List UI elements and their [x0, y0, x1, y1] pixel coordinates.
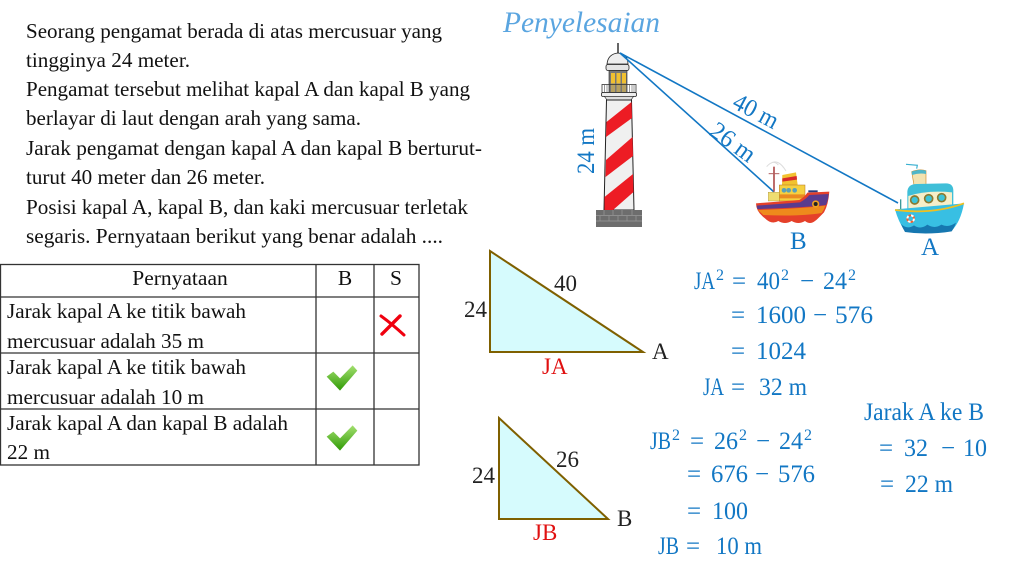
calculation: JB: 576	[778, 461, 815, 488]
calculation: JA: 1600	[756, 302, 806, 329]
text block: problem statement	[26, 19, 482, 248]
side label 40: 40	[554, 271, 577, 296]
icon: ship A	[895, 164, 964, 234]
calculation: JB	[650, 427, 815, 560]
calculation: JA: −	[813, 302, 827, 329]
row 1 text: mercusuar adalah 35 m	[7, 329, 204, 353]
table header: S	[390, 266, 402, 290]
sight line to ship B	[620, 53, 774, 192]
calculation: distance A to B: −	[941, 435, 955, 462]
row 3 text	[7, 411, 288, 464]
calculation: JB: JB	[658, 533, 679, 560]
sight line to ship A	[620, 53, 898, 203]
calculation: JA: 32 m	[759, 374, 808, 401]
calculation: JB: 676	[711, 461, 748, 488]
calculation: JA: 2	[781, 267, 789, 284]
calculation: distance A to B: =	[880, 471, 894, 498]
calculation: JB: =	[690, 428, 704, 455]
text block: problem statement: tingginya 24 meter.	[26, 48, 190, 72]
calculation: distance A to B: 32	[904, 435, 928, 462]
icon: ship B	[756, 162, 829, 223]
calculation: JB: −	[756, 428, 770, 455]
side label 24: 24	[472, 463, 496, 488]
table header: B	[338, 266, 352, 290]
text block: problem statement: Jarak pengamat dengan kapal A dan kapal B berturut-	[26, 136, 482, 160]
calculation: JB: =	[686, 533, 700, 560]
calculation: distance A to B: 22 m	[905, 471, 954, 498]
calculation: distance A to B	[864, 399, 987, 498]
calculation: JA: 2	[716, 267, 724, 284]
side label JB: JB	[533, 520, 557, 545]
row 1 text: Jarak kapal A ke titik bawah	[7, 299, 246, 323]
icon: lighthouse	[596, 43, 642, 227]
calculation: JA: 40	[757, 268, 780, 295]
row 2 text	[7, 355, 246, 409]
calculation: JB: =	[687, 461, 701, 488]
row 3 text: 22 m	[7, 440, 50, 464]
triangle B	[472, 418, 632, 545]
calculation: JB: 2	[804, 427, 812, 444]
calculation: JA: 2	[848, 267, 856, 284]
calculation: JA: 576	[835, 302, 873, 329]
label: 24 m height: 24 m	[573, 128, 600, 174]
label: A: A	[921, 234, 939, 261]
calculation: distance A to B: 10	[963, 435, 987, 462]
calculation: JB: 100	[712, 498, 748, 525]
calculation: JA: JA	[703, 374, 724, 401]
calculation: distance A to B: =	[879, 435, 893, 462]
row 2 text: Jarak kapal A ke titik bawah	[7, 355, 246, 379]
triangle A	[464, 251, 669, 379]
side label 24: 24	[464, 297, 488, 322]
calculation: JA: =	[731, 302, 745, 329]
table header	[132, 266, 402, 290]
calculation: JB: 24	[779, 428, 803, 455]
calculation: JB: 26	[714, 428, 738, 455]
icon: red cross	[381, 316, 404, 335]
icon: green check row 2	[327, 365, 357, 391]
calculation: JA: JA	[694, 268, 715, 295]
text block: problem statement: turut 40 meter dan 26 meter.	[26, 165, 265, 189]
calculation: JA	[694, 267, 873, 401]
vertex label B: B	[617, 506, 632, 531]
calculation: JB: 2	[739, 427, 747, 444]
side label JA: JA	[542, 354, 568, 379]
icon: green check row 3	[327, 425, 357, 451]
label: 26 m: 26 m	[704, 117, 761, 169]
side label 26: 26	[556, 447, 579, 472]
calculation: JB: −	[755, 461, 769, 488]
row 2 text: mercusuar adalah 10 m	[7, 385, 204, 409]
calculation: JB: 10 m	[716, 533, 762, 560]
row 1 text	[7, 299, 246, 353]
text block: problem statement: Seorang pengamat berada di atas mercusuar yang	[26, 19, 442, 43]
calculation: JA: 24	[823, 268, 847, 295]
label: B: B	[790, 228, 807, 255]
calculation: distance A to B: Jarak A ke B	[864, 399, 984, 426]
calculation: JA: 1024	[756, 338, 806, 365]
calculation: JB: 2	[672, 427, 680, 444]
text block: problem statement: segaris. Pernyataan berikut yang benar adalah ....	[26, 224, 443, 248]
heading: Penyelesaian: Penyelesaian	[502, 6, 660, 39]
calculation: JA: =	[731, 374, 745, 401]
text block: problem statement: Posisi kapal A, kapal B, dan kaki mercusuar terletak	[26, 195, 468, 219]
calculation: JA: =	[731, 338, 745, 365]
table header: Pernyataan	[132, 266, 228, 290]
calculation: JB: JB	[650, 428, 671, 455]
table: statements	[0, 264, 419, 465]
vertex label A: A	[652, 339, 669, 364]
row 3 text: Jarak kapal A dan kapal B adalah	[7, 411, 288, 435]
calculation: JA: −	[800, 268, 814, 295]
calculation: JA: =	[732, 268, 746, 295]
text block: problem statement: Pengamat tersebut melihat kapal A dan kapal B yang	[26, 77, 470, 101]
calculation: JB: =	[687, 498, 701, 525]
text block: problem statement: berlayar di laut dengan arah yang sama.	[26, 106, 361, 130]
label: 40 m: 40 m	[728, 88, 784, 135]
